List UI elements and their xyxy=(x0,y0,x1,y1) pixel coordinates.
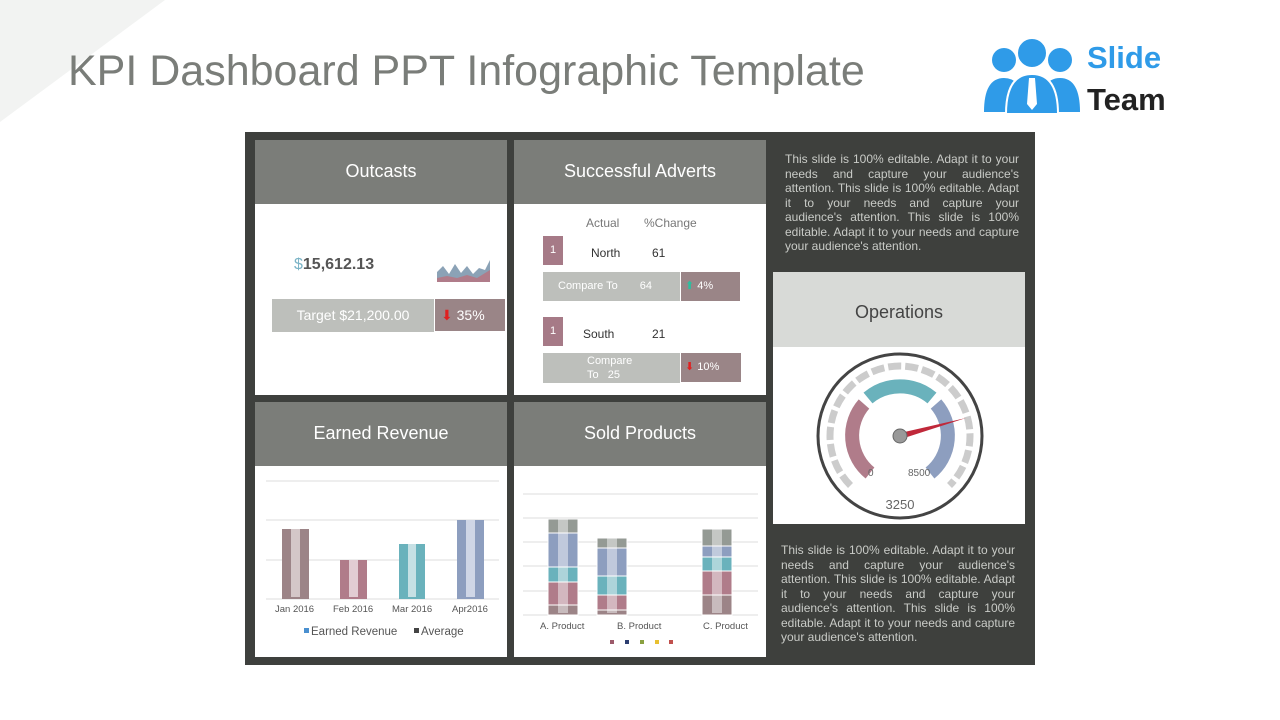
title: KPI Dashboard PPT Infographic Template xyxy=(68,47,865,95)
stacked bar chart: B. Product xyxy=(617,621,662,632)
panel: successful adverts: ⬆ 4% xyxy=(685,280,713,292)
panel: successful adverts: Compare xyxy=(587,355,632,367)
bar chart: revenue: Apr2016 xyxy=(452,604,488,615)
text block: top: This slide is 100% editable. Adapt it to your needs and capture your audience's attention. This slide is 100% editable. Adapt it to your needs and capture your audience's attention. This slide is 100% editable. Adapt it to your needs and capture your audience's attention. xyxy=(785,152,1019,253)
panel: successful adverts: South xyxy=(583,327,614,341)
stacked bar chart xyxy=(523,494,758,644)
panel: sold products: Sold Products xyxy=(584,423,696,443)
panel: successful adverts: To 25 xyxy=(587,369,620,381)
logo: Slide xyxy=(1087,40,1161,75)
gauge: 3250 xyxy=(886,497,914,512)
logo xyxy=(984,39,1166,117)
panel: successful adverts: 1 xyxy=(550,244,556,256)
gauge: 8500 xyxy=(908,468,931,479)
panel: operations xyxy=(773,272,1025,524)
panel: successful adverts: North xyxy=(591,246,620,260)
panel: successful adverts: 21 xyxy=(652,327,665,341)
panel: successful adverts: Compare To 64 xyxy=(558,280,652,292)
panel: earned revenue: Earned Revenue xyxy=(313,423,449,443)
panel: operations: Operations xyxy=(855,302,943,322)
logo: Team xyxy=(1087,82,1166,117)
panel: outcasts: ⬇ 35% xyxy=(441,307,485,323)
bar chart: revenue: Mar 2016 xyxy=(392,604,432,615)
panel: successful adverts: 1 xyxy=(550,325,556,337)
bar chart: revenue xyxy=(266,480,499,638)
panel: sold products xyxy=(514,402,766,657)
decorative corner xyxy=(0,0,164,122)
dashboard frame xyxy=(245,132,1035,665)
bar chart: revenue: Average xyxy=(421,626,464,638)
panel: outcasts xyxy=(255,140,507,395)
panel: outcasts: Outcasts xyxy=(345,161,417,181)
panel: successful adverts: %Change xyxy=(644,216,697,230)
panel: earned revenue xyxy=(255,402,507,657)
panel: successful adverts: ⬇ 10% xyxy=(685,361,719,373)
panel: successful adverts xyxy=(514,140,766,395)
bar chart: revenue: Earned Revenue xyxy=(311,626,397,638)
panel: outcasts: Target $21,200.00 xyxy=(297,307,409,323)
panel: outcasts: $15,612.13 xyxy=(294,256,374,273)
text block: bottom: This slide is 100% editable. Adapt it to your needs and capture your audience's attention. This slide is 100% editable. Adapt it to your needs and capture your audience's attention. This slide is 100% editable. Adapt it to your needs and capture your audience's attention. xyxy=(781,543,1015,644)
bar chart: revenue: Feb 2016 xyxy=(333,604,373,615)
stacked bar chart: A. Product xyxy=(540,621,585,632)
gauge xyxy=(816,352,984,520)
panel: successful adverts: Actual xyxy=(586,216,619,230)
bar chart: revenue: Jan 2016 xyxy=(275,604,314,615)
panel: successful adverts: Successful Adverts xyxy=(564,161,716,181)
panel: successful adverts: 61 xyxy=(652,246,665,260)
stacked bar chart: C. Product xyxy=(703,621,748,632)
gauge: 0 xyxy=(868,468,874,479)
